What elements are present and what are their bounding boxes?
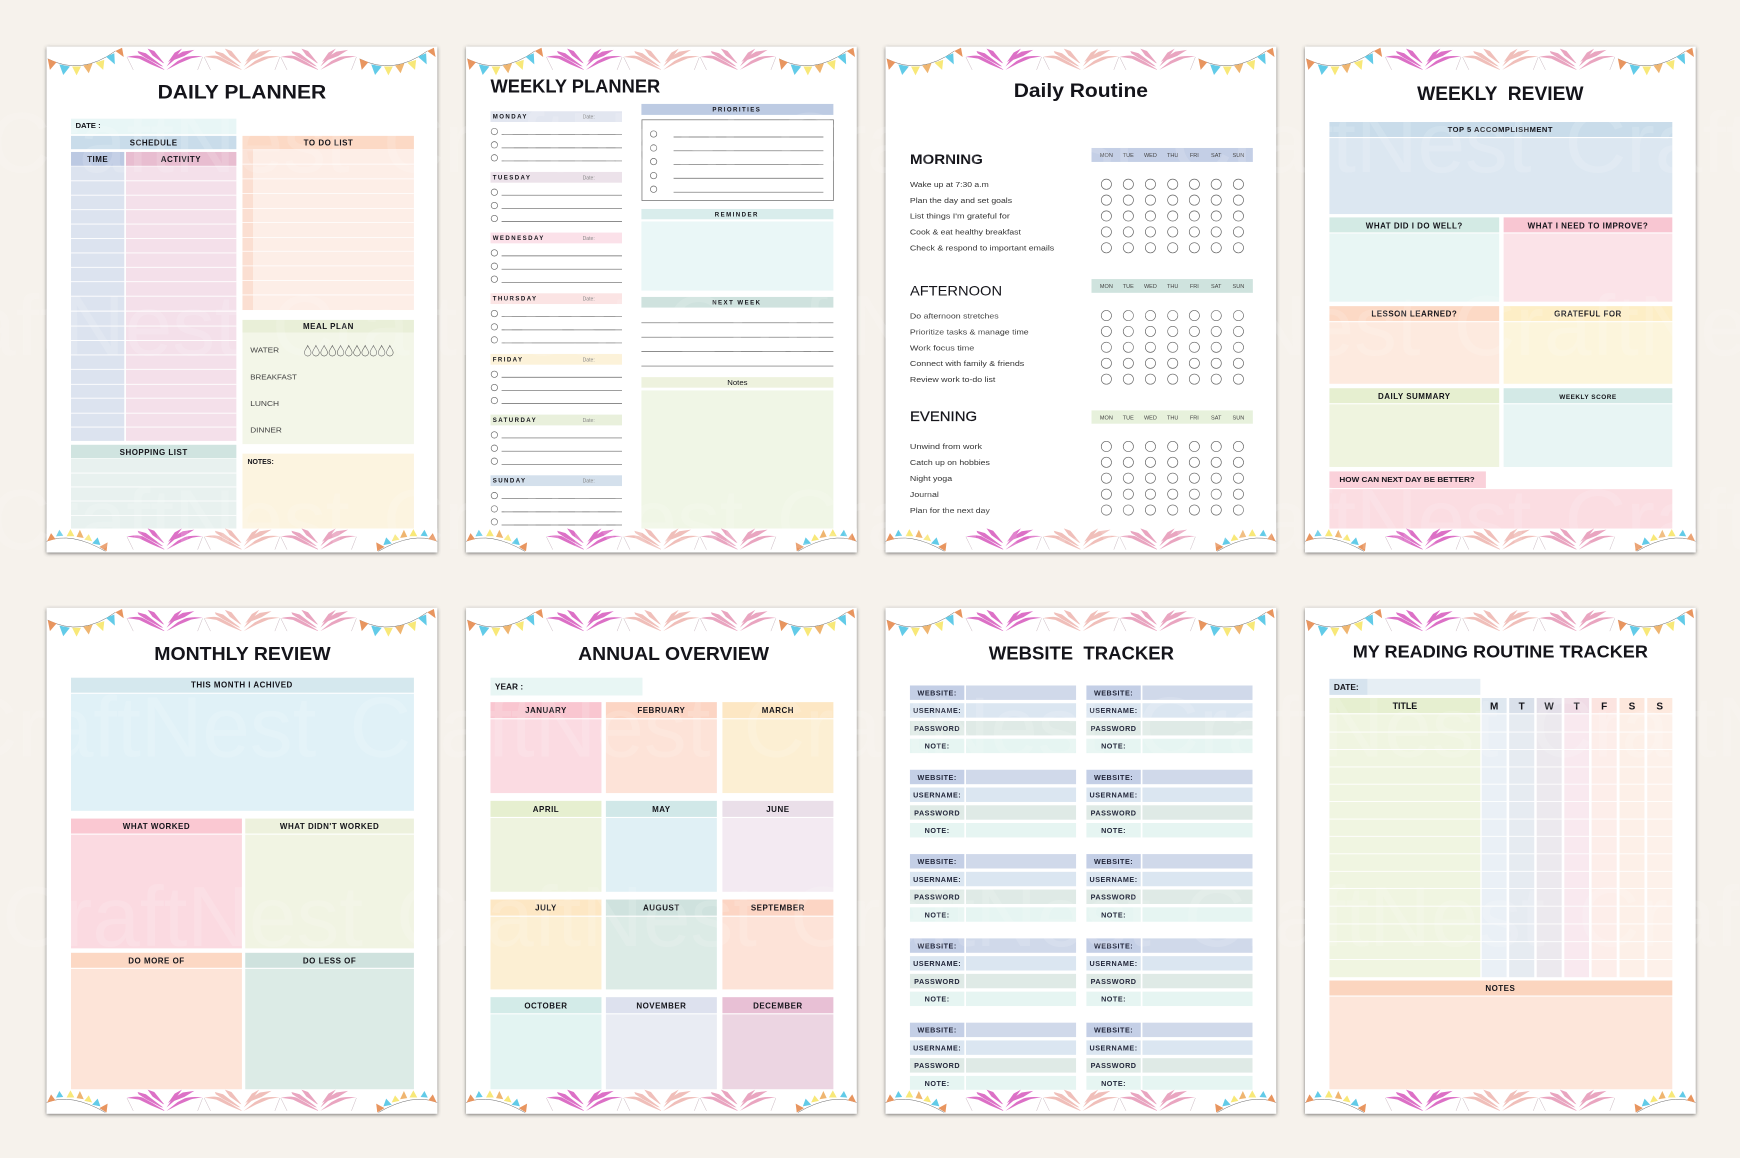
login block 2 right: PASSWORD [1091,808,1137,817]
page: website tracker [886,608,1276,1114]
login block 1 right: WEBSITE: [1094,688,1133,697]
title: my reading routine tracker: MY READING ROUTINE TRACKER [1353,642,1649,662]
afternoon section: WED [1144,284,1157,290]
march: MARCH [762,706,794,715]
morning section: THU [1167,153,1178,159]
meal plan panel [242,320,414,444]
evening section: SAT [1211,415,1222,421]
shopping list panel [71,445,236,531]
login block 3 right: WEBSITE: [1094,857,1133,866]
login block 2 left: WEBSITE: [918,773,957,782]
afternoon section: Connect with family & friends [910,359,1024,368]
october: OCTOBER [524,1001,568,1010]
tuesday [490,172,622,222]
friday [490,354,622,404]
morning section: List things I'm grateful for [910,212,1010,221]
thursday: THURSDAY [493,296,538,303]
schedule panel: ACTIVITY [161,155,201,164]
wednesday [490,233,622,282]
date bar [1329,679,1480,695]
do more of panel [71,953,242,1089]
login block 3 right [1086,854,1253,922]
evening section [910,408,1253,515]
login block 5 left: USERNAME: [913,1043,961,1052]
title: annual overview: ANNUAL OVERVIEW [578,643,769,664]
notes panel: NOTES: [247,459,274,466]
login block 1 left: WEBSITE: [918,688,957,697]
priorities panel [641,104,833,201]
login block 4 right: PASSWORD [1091,977,1137,986]
login block 3 left: NOTE: [925,910,950,919]
morning section: Plan the day and set goals [910,196,1012,205]
login block 5 right: NOTE: [1101,1079,1126,1088]
daily summary panel [1329,388,1499,467]
thursday [490,293,622,343]
priorities panel: PRIORITIES [712,107,761,114]
meal plan panel: WATER [250,346,280,355]
login block 2 right: USERNAME: [1090,791,1138,800]
icon: water drops [304,346,393,356]
day columns [1329,698,1672,977]
notes panel [242,454,414,530]
april: APRIL [533,805,559,814]
login block 5 left: NOTE: [925,1079,950,1088]
login block 4 right: USERNAME: [1090,959,1138,968]
thursday: Date: [583,297,595,303]
title: monthly review: MONTHLY REVIEW [154,643,331,664]
saturday: SATURDAY [493,417,537,424]
login block 3 left: USERNAME: [913,875,961,884]
sunday: Date: [583,479,595,485]
login block 5 right: PASSWORD [1091,1061,1137,1070]
november: NOVEMBER [636,1001,686,1010]
evening section: Night yoga [910,474,953,483]
login block 1 right: USERNAME: [1090,706,1138,715]
login block 2 left: USERNAME: [913,791,961,800]
watermark: CraftNest [1060,279,1421,374]
weekly score panel: WEEKLY SCORE [1559,394,1617,401]
grateful for panel: GRATEFUL FOR [1554,310,1622,319]
afternoon section: MON [1100,284,1113,290]
login block 2 left: NOTE: [925,826,950,835]
watermark: CraftNest [666,279,1027,374]
login block 2 right: WEBSITE: [1094,773,1133,782]
login block 2 right: NOTE: [1101,826,1126,835]
watermark: CraftNest [1171,473,1532,568]
top 5 accomplishment panel: TOP 5 ACCOMPLISHMENT [1448,125,1553,134]
may: MAY [652,805,671,814]
watermark: CraftNest [790,870,1151,965]
day columns: F [1601,701,1607,712]
reminder panel: REMINDER [715,212,759,219]
next week panel [641,297,833,366]
title: daily routine: Daily Routine [1014,80,1148,102]
login block 1 left [910,685,1076,753]
login block 4 right: WEBSITE: [1094,941,1133,950]
sunday: SUNDAY [493,478,527,485]
watermark: CraftNest [1184,870,1545,965]
afternoon section: SAT [1211,284,1222,290]
login block 5 right [1086,1023,1253,1090]
watermark [0,96,1740,965]
how can next day be better panel [1329,471,1672,530]
watermark: CraftNest [1171,96,1532,191]
meal plan panel: MEAL PLAN [303,322,354,331]
watermark: CraftNest [777,473,1138,568]
afternoon section: Prioritize tasks & manage time [910,327,1029,336]
january [490,702,601,793]
weekly score panel [1504,388,1672,467]
lesson learned panel: LESSON LEARNED? [1371,310,1457,319]
login block 4 right [1086,938,1253,1006]
page: annual overview [466,608,857,1114]
login block 2 left: PASSWORD [914,808,960,817]
do more of panel: DO MORE OF [128,956,185,965]
morning section: FRI [1190,153,1199,159]
august [606,900,717,989]
login block 3 right: PASSWORD [1091,893,1137,902]
day columns: T [1519,701,1525,712]
morning section: TUE [1123,153,1134,159]
day columns: W [1544,701,1554,712]
watermark: CraftNest [396,870,757,965]
afternoon section: SUN [1233,284,1244,290]
watermark: CraftNest [777,96,1138,191]
evening section: THU [1167,415,1178,421]
page: weekly planner [466,47,857,552]
january: JANUARY [525,706,567,715]
evening section: WED [1144,415,1157,421]
morning section: Check & respond to important emails [910,244,1054,253]
day columns: S [1656,701,1663,712]
december: DECEMBER [753,1001,803,1010]
monday: Date: [583,115,595,121]
may [606,801,717,892]
saturday [490,415,622,464]
wednesday: Date: [583,236,595,242]
title column: TITLE [1393,701,1417,711]
tuesday: TUESDAY [493,174,531,181]
meal plan panel: BREAKFAST [250,372,297,381]
morning section: Wake up at 7:30 a.m [910,180,989,189]
watermark: CraftNest [2,870,363,965]
february [606,702,717,793]
evening section: Unwind from work [910,442,982,451]
september: SEPTEMBER [751,904,805,913]
july [490,900,601,989]
june: JUNE [766,805,790,814]
notes panel: NOTES [1485,984,1515,993]
day columns: M [1490,701,1498,712]
notes panel [1329,981,1672,1089]
what didn't worked panel [245,819,414,948]
december [722,997,833,1089]
meal plan panel: DINNER [250,426,282,435]
friday: Date: [583,357,595,363]
wednesday: WEDNESDAY [493,235,545,242]
year bar: YEAR : [495,681,523,691]
morning section: Cook & eat healthy breakfast [910,228,1022,237]
watermark: CraftNest [350,680,711,775]
evening section: MON [1100,415,1113,421]
page: daily routine [886,47,1276,552]
login block 5 right: USERNAME: [1090,1043,1138,1052]
what worked panel: WHAT WORKED [123,822,190,831]
june [722,801,833,892]
year bar [490,678,643,695]
lesson learned panel [1329,306,1499,384]
afternoon section: Do afternoon stretches [910,311,999,320]
login block 1 left: USERNAME: [913,706,961,715]
evening section: SUN [1233,415,1244,421]
morning section: WED [1144,153,1157,159]
watermark: CraftNest [383,473,744,568]
september [722,900,833,989]
reminder panel [641,209,833,291]
morning section: SAT [1211,153,1222,159]
afternoon section: THU [1167,284,1178,290]
watermark: CraftNest [383,96,744,191]
what i need to improve panel: WHAT I NEED TO IMPROVE? [1528,221,1648,230]
login block 4 left: WEBSITE: [918,941,957,950]
login block 1 left: NOTE: [925,742,950,751]
tuesday: Date: [583,175,595,181]
login block 4 left: NOTE: [925,995,950,1004]
next week panel: NEXT WEEK [712,300,761,307]
evening section: TUE [1123,415,1134,421]
title: weekly review: WEEKLY REVIEW [1417,83,1584,105]
login block 1 right: NOTE: [1101,742,1126,751]
sunday [490,475,622,525]
notes panel: Notes [727,378,748,387]
login block 1 right: PASSWORD [1091,724,1137,733]
evening section: Journal [910,490,939,499]
login block 4 left: USERNAME: [913,959,961,968]
date bar: DATE : [75,121,101,130]
watermark: CraftNest [743,680,1105,775]
day columns: S [1629,701,1636,712]
july: JULY [535,904,557,913]
how can next day be better panel: HOW CAN NEXT DAY BE BETTER? [1339,475,1475,484]
evening section: Plan for the next day [910,506,990,515]
evening section: EVENING [910,408,977,424]
do less of panel: DO LESS OF [303,956,356,965]
login block 3 right: NOTE: [1101,910,1126,919]
this month i achived panel [71,678,414,811]
grateful for panel [1504,306,1672,384]
saturday: Date: [583,418,595,424]
login block 1 left: PASSWORD [914,724,960,733]
day columns: T [1574,701,1580,712]
what didn't worked panel: WHAT DIDN'T WORKED [280,822,379,831]
morning section [910,148,1253,253]
daily summary panel: DAILY SUMMARY [1378,392,1451,401]
what did i do well panel [1329,217,1499,302]
title: weekly planner: WEEKLY PLANNER [490,76,661,97]
login block 3 left: WEBSITE: [918,857,957,866]
login block 5 left: WEBSITE: [918,1026,957,1035]
friday: FRIDAY [493,356,523,363]
afternoon section: Review work to-do list [910,375,996,384]
what worked panel [71,819,242,948]
login block 4 left: PASSWORD [914,977,960,986]
schedule panel [71,136,236,441]
february: FEBRUARY [637,706,686,715]
what did i do well panel: WHAT DID I DO WELL? [1366,221,1463,230]
evening section: FRI [1190,415,1199,421]
morning section: MORNING [910,151,983,167]
evening section: Catch up on hobbies [910,458,990,467]
title: website tracker: WEBSITE TRACKER [989,642,1174,663]
to do list panel [242,136,414,310]
november [606,997,717,1089]
date bar: DATE: [1334,682,1359,692]
april [490,801,601,892]
login block 3 left [910,854,1076,922]
title column [1329,698,1480,977]
login block 2 right [1086,770,1253,837]
afternoon section: FRI [1190,284,1199,290]
march [722,702,833,793]
login block 5 right: WEBSITE: [1094,1026,1133,1035]
monday: MONDAY [493,114,528,121]
to do list panel: TO DO LIST [304,138,353,147]
login block 5 left [910,1023,1076,1090]
login block 1 right [1086,685,1253,753]
page: my reading routine tracker [1305,608,1696,1114]
login block 3 left: PASSWORD [914,893,960,902]
morning section: MON [1100,153,1113,159]
login block 2 left [910,770,1076,837]
monday [490,111,622,161]
what i need to improve panel [1504,217,1672,302]
login block 4 left [910,938,1076,1006]
afternoon section [910,279,1253,384]
this month i achived panel: THIS MONTH I ACHIVED [191,681,293,690]
meal plan panel: LUNCH [250,399,279,408]
morning section: SUN [1233,153,1244,159]
october [490,997,601,1089]
schedule panel: TIME [87,155,108,164]
notes panel [641,377,833,530]
login block 4 right: NOTE: [1101,995,1126,1004]
watermark: CraftNest [1137,680,1498,775]
page: weekly review [1305,47,1696,552]
login block 5 left: PASSWORD [914,1061,960,1070]
page: monthly review [47,608,437,1114]
afternoon section: TUE [1123,284,1134,290]
title: daily planner: DAILY PLANNER [158,82,326,104]
shopping list panel: SHOPPING LIST [120,448,188,457]
afternoon section: Work focus time [910,343,974,352]
date bar [71,119,236,134]
login block 3 right: USERNAME: [1090,875,1138,884]
watermark: CraftNest [272,279,633,374]
top 5 accomplishment panel [1329,122,1672,214]
afternoon section: AFTERNOON [910,283,1002,299]
schedule panel: SCHEDULE [130,138,178,147]
do less of panel [245,953,414,1089]
page: daily planner [47,47,437,552]
august: AUGUST [643,904,680,913]
